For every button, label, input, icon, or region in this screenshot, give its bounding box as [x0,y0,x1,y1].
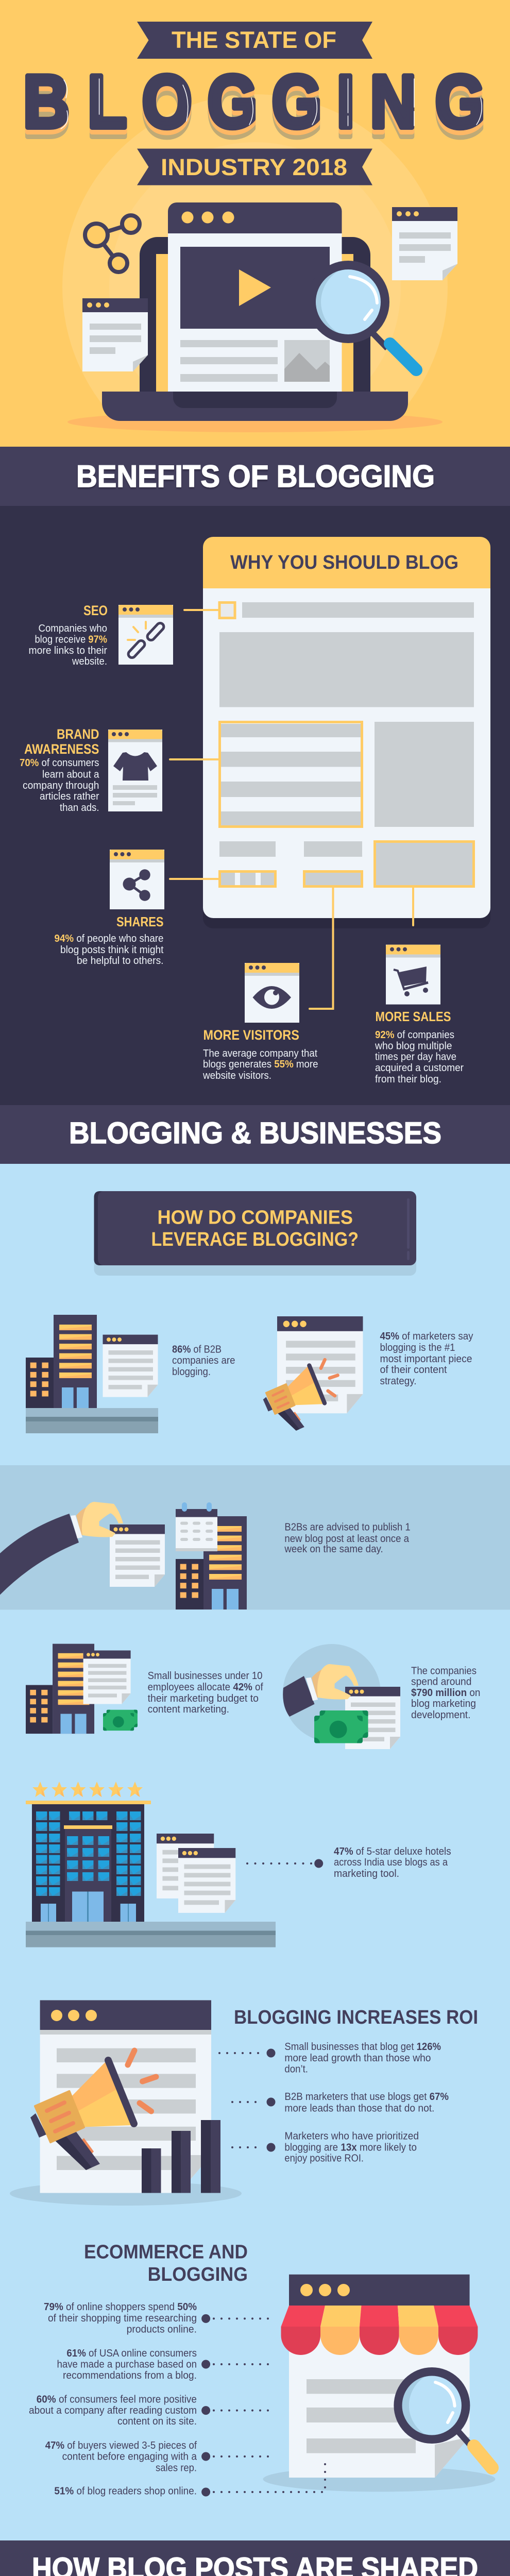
stat: 45 percent of marketers: 45% of marketers say [380,1331,473,1342]
block: blogging increases ROI: enjoy positive ROI. [284,2153,364,2164]
block: ecommerce and blogging: recommendations from a blog. [63,2370,197,2381]
benefit: more visitors [202,963,318,1081]
benefit: more visitors: website visitors. [202,1070,271,1081]
icon: share card [110,850,164,909]
stat: 45 percent of marketers: of their content [380,1364,447,1376]
illustration: storefront [263,2275,496,2492]
banner: the state of: THE STATE OF [172,27,336,53]
stat: publish once a week: week on the same day. [284,1544,383,1555]
benefit: brand awareness: articles rather [40,791,99,802]
stat: publish once a week [0,1502,411,1609]
heading box: how do companies leverage blogging [94,1191,416,1276]
stat: companies spend 790 million: spend around [411,1676,471,1688]
benefit: more visitors: The average company that [203,1048,317,1059]
section header: benefits of blogging: BENEFITS OF BLOGGING [76,459,435,494]
benefit: more sales: 92% of companies [375,1029,454,1041]
banner: industry 2018 [137,148,372,185]
dotted connectors [219,2053,263,2147]
title: blogging: BLOGGING [23,60,485,143]
icon: magnifying glass [307,261,416,370]
stat: publish once a week: new blog post at least once a [284,1533,410,1545]
stat: companies spend 790 million: $790 million on [411,1687,480,1699]
benefit: more visitors: MORE VISITORS [203,1027,299,1043]
illustration: arm, document, calendar and buildings [0,1502,247,1609]
banner: the state of [137,22,372,59]
stat: small businesses 42 percent: employees allocate 42% of [148,1682,263,1693]
stat: small businesses 42 percent: Small businesses under 10 [148,1670,263,1682]
stat: 45 percent of marketers: most important piece [380,1353,472,1365]
block: blogging increases ROI: Marketers who have prioritized [284,2131,419,2142]
block: blogging increases ROI: don’t. [284,2064,308,2075]
benefit: shares: be helpful to others. [77,955,164,967]
stat: companies spend 790 million [283,1644,480,1749]
hero illustration: laptop and browser [67,202,443,432]
icon: magnifying glass [394,2367,492,2468]
note: right [392,207,457,280]
benefit: brand awareness: company through [23,780,99,791]
dotted connectors [201,2314,325,2497]
heading box: how do companies leverage blogging: LEVERAGE BLOGGING? [151,1229,359,1250]
illustration: document, megaphone and bars [10,2000,242,2206]
block: blogging increases ROI: Small businesses that blog get 126% [284,2041,441,2053]
block: ecommerce and blogging [29,2241,496,2497]
icon: eye card [245,963,299,1023]
hero background [0,0,510,480]
section header: blogging and businesses [0,1105,510,1164]
block: ecommerce and blogging: of their shopping time researching [48,2313,197,2324]
block: blogging increases ROI: more lead growth than those who [284,2053,431,2064]
block: ecommerce and blogging: content on its site. [117,2416,197,2427]
block: ecommerce and blogging: ECOMMERCE AND [84,2241,248,2263]
benefit: more visitors: blogs generates 55% more [203,1059,318,1070]
benefit: SEO: Companies who [38,623,107,634]
benefit: SEO: more links to their [29,645,107,656]
benefit: shares: 94% of people who share [55,933,164,944]
benefit: more sales: acquired a customer [375,1062,464,1074]
block: blogging increases ROI: blogging are 13x more likely to [284,2142,417,2154]
benefit: more sales: from their blog. [375,1074,441,1085]
dotted connector [247,1859,323,1868]
block: ecommerce and blogging: 79% of online shoppers spend 50% [44,2301,197,2313]
note: left [82,298,148,371]
section header: blogging and businesses: BLOGGING & BUSINESSES [69,1116,441,1150]
benefit: brand awareness: AWARENESS [24,741,99,757]
stat: 5-star hotels: 47% of 5-star deluxe hotels [334,1846,451,1857]
stat: small businesses 42 percent: content marketing. [148,1704,229,1715]
benefit: shares [55,850,164,967]
benefit: SEO: website. [72,656,107,667]
stat: 45 percent of marketers: strategy. [380,1376,416,1387]
icon: t-shirt card [108,730,162,811]
illustration: buildings, document and money [26,1644,141,1734]
illustration: hotel [26,1782,276,1947]
panel: blue background [0,1164,510,2540]
illustration: document and megaphone [263,1316,363,1431]
block: ecommerce and blogging: have made a purchase based on [57,2359,197,2370]
block: ecommerce and blogging: 60% of consumers feel more positive [37,2394,197,2405]
benefit: SEO: SEO [83,603,108,618]
benefit: SEO: blog receive 97% [35,634,107,645]
block: ecommerce and blogging: 51% of blog readers shop online. [54,2485,197,2497]
illustration: buildings and document [26,1315,158,1433]
block: ecommerce and blogging: BLOGGING [148,2264,248,2285]
stat: 86 percent of B2B companies: companies are [172,1355,235,1366]
block: blogging increases ROI: more leads than those that do not. [284,2103,434,2114]
panel: why you should blog [203,537,490,928]
panel heading: WHY YOU SHOULD BLOG [230,552,458,573]
block: ecommerce and blogging: 61% of USA online consumers [66,2348,197,2359]
stat: small businesses 42 percent [26,1644,263,1734]
panel: benefits background [0,506,510,1105]
stat: 45 percent of marketers: blogging is the #1 [380,1342,455,1353]
block: ecommerce and blogging: about a company after reading custom [29,2405,197,2416]
benefit: more sales: who blog multiple [375,1041,452,1052]
benefit: brand awareness: BRAND [57,726,99,742]
stat: companies spend 790 million: blog marketing [411,1698,476,1709]
benefit: brand awareness: 70% of consumers [20,757,99,769]
block: ecommerce and blogging: content before engaging with a [62,2451,197,2463]
benefit: shares: SHARES [116,914,164,929]
benefit: more sales: times per day have [375,1051,456,1062]
benefit: more sales: MORE SALES [375,1009,451,1024]
stat: companies spend 790 million: The companies [411,1665,477,1676]
benefit: shares: blog posts think it might [60,944,164,956]
stat: 5-star hotels: marketing tool. [334,1868,399,1879]
stat: companies spend 790 million: development. [411,1709,471,1721]
icon: cart card [386,945,440,1005]
section header: how blog posts are shared [0,2540,510,2576]
block: blogging increases ROI: BLOGGING INCREASES ROI [234,2007,478,2028]
icon: chain link [118,605,173,665]
benefit: brand awareness [20,726,162,814]
block: ecommerce and blogging: products online. [127,2324,197,2335]
banner: industry 2018: INDUSTRY 2018 [161,154,347,180]
benefit: brand awareness: learn about a [42,769,99,780]
stat: 5-star hotels: across India use blogs as a [334,1857,448,1868]
block: blogging increases ROI [10,2000,478,2206]
stat: 5-star hotels [26,1782,451,1947]
benefit: brand awareness: than ads. [60,802,99,814]
block: blogging increases ROI: B2B marketers that use blogs get 67% [284,2091,449,2103]
page wireframe [219,602,474,886]
icon: share nodes [85,215,140,272]
stat: publish once a week: B2Bs are advised to publish 1 [284,1522,411,1533]
section header: benefits of blogging [0,447,510,506]
block: ecommerce and blogging: 47% of buyers viewed 3-5 pieces of [45,2440,197,2451]
heading box: how do companies leverage blogging: HOW DO COMPANIES [158,1207,353,1228]
block: ecommerce and blogging: sales rep. [156,2462,197,2473]
stat: 86 percent of B2B companies: blogging. [172,1366,211,1378]
benefit: SEO [29,603,173,667]
stat: 45 percent of marketers [263,1316,473,1431]
benefit: more sales [375,945,464,1085]
stat: 86 percent of B2B companies: 86% of B2B [172,1344,222,1355]
illustration: arm, document and money [283,1644,400,1749]
connector lines [170,610,413,1009]
stat: 86 percent of B2B companies [26,1315,235,1433]
stat: small businesses 42 percent: their marketing budget to [148,1693,259,1704]
